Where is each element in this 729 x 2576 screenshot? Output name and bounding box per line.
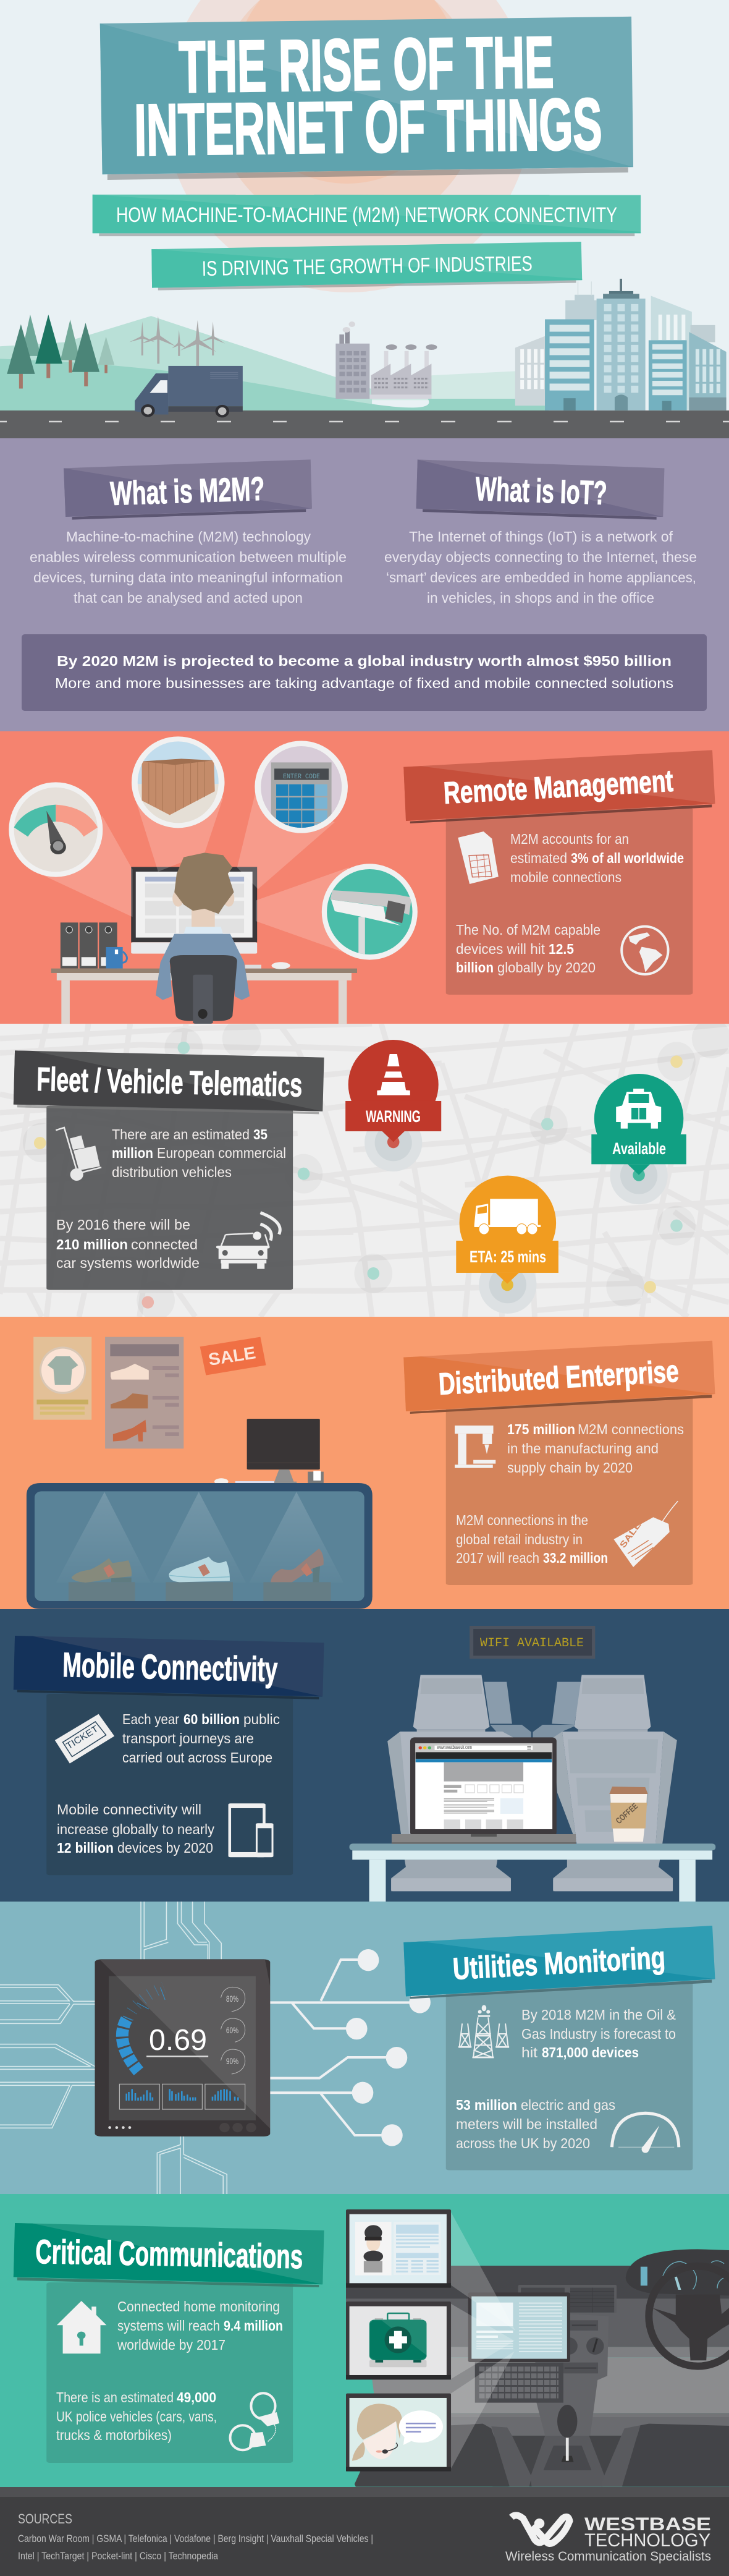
stat: 33.2 million retail <box>456 1512 608 1566</box>
tablet reading: 0.69 <box>149 2024 207 2057</box>
footer <box>0 2487 729 2576</box>
sim and globe panel background <box>446 808 693 995</box>
stat: 33.2 million retail: M2M connections in the <box>456 1512 588 1528</box>
text: IoT definition: everyday objects connecting to the Internet, these <box>384 549 697 565</box>
subtitle banners <box>93 195 641 291</box>
text: M2M definition: enables wireless communication between multiple <box>30 549 347 565</box>
connector nodes <box>346 1949 431 2146</box>
panel background <box>46 2282 293 2463</box>
steering wheel <box>649 2266 729 2366</box>
text: IoT definition: in vehicles, in shops and in the office <box>427 590 654 606</box>
vents and controls <box>518 2285 617 2373</box>
stat: 35 million vehicles: million <box>112 1145 153 1161</box>
stat: 33.2 million retail: 33.2 million <box>543 1550 608 1566</box>
landscape scene <box>0 279 727 411</box>
icon: oil rigs <box>458 2017 509 2057</box>
stat: 12.5 billion devices: devices will hit <box>456 941 546 957</box>
text: M2M definition: devices, turning data into meaningful information <box>33 569 343 585</box>
stat: 53 million meters <box>456 2097 615 2151</box>
operator <box>156 852 250 1024</box>
icon: sim card <box>458 831 499 884</box>
screen: suspect profile <box>346 2209 451 2288</box>
centre console <box>531 2314 609 2487</box>
poster: shirt <box>33 1337 91 1420</box>
panel background <box>446 1983 693 2170</box>
stat: 210 million car systems: car systems worldwide <box>56 1255 200 1271</box>
stat: 60 billion journeys <box>122 1711 280 1766</box>
stat: 175 million connections: supply chain by 2020 <box>507 1460 633 1476</box>
title banner <box>100 17 633 180</box>
shoe: brown brogue <box>72 1558 132 1583</box>
heading: mobile connectivity: Mobile Connectivity <box>62 1645 278 1689</box>
sources: Carbon War Room | GSMA | Telefonica | Vodafone | Berg Insight | Vauxhall Special Vehicles | <box>18 2533 373 2544</box>
stat: 3% of mobile connections <box>510 831 684 885</box>
icon: security camera <box>322 864 418 960</box>
icon: price tag <box>613 1501 678 1567</box>
shoe: sneaker <box>169 1557 230 1582</box>
subtitle banners: IS DRIVING THE GROWTH OF INDUSTRIES <box>202 252 533 281</box>
passenger seat <box>601 2424 729 2487</box>
stat: 49,000 police vehicles: UK police vehicles (cars, vans, <box>56 2408 217 2425</box>
callout: global industry: By 2020 M2M is projected to become a global industry worth almost $950 billion <box>57 653 672 669</box>
heading: utilities monitoring: Utilities Monitoring <box>452 1940 666 1986</box>
text: IoT definition <box>384 529 697 606</box>
stat: 60 billion journeys: Each year <box>122 1711 179 1727</box>
stat: 49,000 police vehicles: 49,000 <box>177 2389 216 2405</box>
stat: 49,000 police vehicles <box>56 2389 217 2443</box>
tablet <box>95 1959 270 2136</box>
connectors <box>270 1960 421 2135</box>
instrument cluster <box>626 2249 729 2295</box>
road <box>0 410 729 438</box>
desk <box>51 962 357 1024</box>
text: M2M definition <box>30 529 347 606</box>
dial labels: 90% <box>226 2056 238 2066</box>
icon: gauge <box>9 782 103 877</box>
circuit traces <box>0 1902 227 2194</box>
stat: 60 billion journeys: transport journeys are <box>122 1730 254 1746</box>
logo: Westbase Technology <box>505 2514 711 2564</box>
stat: 175 million connections: 175 million <box>507 1421 575 1437</box>
stat: 12.5 billion devices: The No. of M2M capable <box>456 922 600 938</box>
screen: first aid kit <box>346 2302 451 2379</box>
stat: 53 million meters: electric and gas <box>521 2097 615 2113</box>
panel background <box>446 1397 693 1585</box>
stat: 35 million vehicles: 35 <box>253 1126 268 1142</box>
stat: 871,000 devices: Gas Industry is forecast to <box>521 2026 676 2042</box>
pin label: available: Available <box>612 1139 666 1158</box>
icon: ticket <box>55 1714 114 1764</box>
stat: 210 million car systems <box>56 1217 200 1271</box>
dial labels: 60% <box>226 2025 238 2035</box>
stat: 9.4 million home systems: worldwide by 2017 <box>117 2337 225 2353</box>
map pin: ETA <box>456 1176 558 1314</box>
stat: 871,000 devices: By 2018 M2M in the Oil & <box>521 2007 676 2023</box>
stat: 60 billion journeys: public <box>243 1711 280 1727</box>
stat: 9.4 million home systems: systems will reach <box>117 2318 220 2334</box>
heading: what is IoT <box>416 459 664 520</box>
text: M2M definition: that can be analysed and acted upon <box>74 590 303 606</box>
stat: 210 million car systems: connected <box>131 1236 198 1252</box>
title text <box>134 22 602 171</box>
table <box>350 1843 715 1902</box>
map roads <box>0 1024 729 1317</box>
stat: 35 million vehicles <box>112 1126 286 1180</box>
callout: global industry <box>22 634 707 711</box>
till <box>214 1419 324 1485</box>
panel: mobile connectivity <box>0 1609 729 1902</box>
illustration: desk, operator and monitored devices <box>9 736 715 1024</box>
icon: keypad <box>255 741 348 833</box>
stat: 12 billion devices <box>57 1801 214 1856</box>
heading: what is M2M: What is M2M? <box>109 470 265 512</box>
stat: 175 million connections: M2M connections <box>578 1421 684 1437</box>
panel: fleet vehicle telematics <box>0 1019 729 1320</box>
panel: critical communications <box>0 2194 729 2487</box>
heading: critical communications: Critical Communications <box>35 2232 303 2276</box>
coffee cup <box>609 1787 648 1842</box>
poster: shoes <box>105 1337 183 1448</box>
stat: 12 billion devices: Mobile connectivity will <box>57 1801 201 1817</box>
stat: 12 billion devices: 12 billion <box>57 1840 114 1856</box>
laptop <box>392 1737 576 1844</box>
stat: 210 million car systems: 210 million <box>56 1236 128 1252</box>
laptop url: www.westbaseuk.com <box>436 1745 472 1750</box>
dial labels: 80% <box>226 1994 238 2004</box>
stat: 3% of mobile connections: 3% of all worldwide <box>571 850 684 866</box>
stat: 3% of mobile connections: mobile connections <box>510 869 622 885</box>
city <box>515 279 727 410</box>
stat: 12.5 billion devices <box>456 922 600 976</box>
logo: Westbase Technology: WESTBASE <box>584 2514 711 2535</box>
icon: hand truck <box>56 1128 101 1181</box>
logo: Westbase Technology: TECHNOLOGY <box>584 2530 710 2551</box>
stat: 12 billion devices: increase globally to nearly <box>57 1821 214 1837</box>
stat: 12.5 billion devices: globally by 2020 <box>497 959 596 976</box>
shoe: high heel <box>271 1549 324 1582</box>
map dots <box>34 1042 683 1309</box>
stat: 60 billion journeys: carried out across Europe <box>122 1749 272 1766</box>
stat: 175 million connections <box>507 1421 684 1476</box>
stat: 3% of mobile connections: M2M accounts for an <box>510 831 629 847</box>
text: IoT definition: The Internet of things (IoT) is a network of <box>409 529 673 545</box>
heading: what is IoT: What is IoT? <box>475 470 607 512</box>
stat: 53 million meters: meters will be installed <box>456 2116 597 2132</box>
wifi sign <box>470 1626 595 1659</box>
display case with shoes <box>27 1483 373 1609</box>
sources: SOURCES <box>18 2511 72 2527</box>
panel: utilities monitoring <box>0 1902 729 2194</box>
front seats <box>387 1675 677 1891</box>
console screen <box>468 2292 570 2362</box>
stat: 35 million vehicles: distribution vehicles <box>112 1164 232 1180</box>
icon: handcuffs <box>230 2393 279 2450</box>
panel: distributed enterprise <box>0 1317 729 1609</box>
icon: globe <box>622 927 668 974</box>
stat: 53 million meters: 53 million <box>456 2097 517 2113</box>
tag text: SALE <box>617 1520 643 1550</box>
panel background <box>46 1694 293 1875</box>
icon: connected car <box>216 1213 280 1269</box>
panel: what is M2M and IoT <box>0 438 729 731</box>
stat: 33.2 million retail: global retail industry in <box>456 1531 583 1547</box>
pin label: ETA: ETA: 25 mins <box>470 1248 546 1266</box>
car interior and screens <box>346 2209 729 2487</box>
stat: 871,000 devices <box>521 2007 676 2060</box>
text: M2M definition: Machine-to-machine (M2M) technology <box>66 529 311 545</box>
stat: 60 billion journeys: 60 billion <box>183 1711 240 1727</box>
stat: 175 million connections: in the manufacturing and <box>507 1440 659 1456</box>
stat: 12.5 billion devices: 12.5 <box>549 941 574 957</box>
icon: house <box>57 2301 106 2353</box>
pin label: warning: WARNING <box>366 1107 421 1126</box>
dial labels <box>226 1994 238 2066</box>
map pin: warning <box>345 1040 441 1171</box>
wifi sign text: WIFI AVAILABLE <box>480 1636 584 1651</box>
sources <box>18 2511 373 2562</box>
stat: 871,000 devices: 871,000 devices <box>542 2044 639 2060</box>
logo: Westbase Technology: Wireless Communication Specialists <box>505 2549 711 2564</box>
stat: 9.4 million home systems: Connected home monitoring <box>117 2298 280 2315</box>
rear seats <box>484 1682 582 1738</box>
icon: drill machine <box>455 1426 495 1468</box>
screen: call operator <box>346 2394 451 2472</box>
factory <box>335 321 437 399</box>
stat: 3% of mobile connections: estimated <box>510 850 567 866</box>
stat: 12 billion devices: devices by 2020 <box>117 1840 213 1856</box>
ticket text: TICKET <box>64 1724 100 1751</box>
icon: shipping container <box>132 736 225 828</box>
stat: 9.4 million home systems: 9.4 million <box>224 2318 283 2334</box>
callout: global industry: More and more businesses are taking advantage of fixed and mobile connected solutions <box>55 675 673 691</box>
stat: 35 million vehicles: European commercial <box>157 1145 286 1161</box>
header panel <box>0 0 729 438</box>
map dot halos <box>23 1019 729 1320</box>
stat: 35 million vehicles: There are an estimated <box>112 1126 250 1142</box>
coffee label: COFFEE <box>613 1801 639 1826</box>
stat: 12.5 billion devices: billion <box>456 959 494 976</box>
sale sign <box>200 1337 266 1375</box>
binders <box>61 922 117 969</box>
icon: meter gauge <box>612 2113 679 2153</box>
map pin: available <box>591 1074 686 1204</box>
keyboard <box>475 2363 563 2403</box>
text: IoT definition: ‘smart’ devices are embedded in home appliances, <box>386 569 696 585</box>
stat: 33.2 million retail: 2017 will reach <box>456 1550 539 1566</box>
stat: 49,000 police vehicles: trucks & motorbikes) <box>56 2427 172 2443</box>
heading: what is M2M <box>64 459 312 520</box>
mug <box>106 947 127 969</box>
stat: 210 million car systems: By 2016 there will be <box>56 1217 190 1233</box>
panel: remote management <box>0 731 729 1024</box>
stat: 49,000 police vehicles: There is an estimated <box>56 2389 174 2405</box>
stats panel background <box>46 1105 293 1290</box>
train seats, table, laptop and coffee <box>350 1675 715 1902</box>
light beams <box>451 2212 515 2468</box>
sources: Intel | TechTarget | Pocket-lint | Cisco | Technopedia <box>18 2550 218 2562</box>
delivery truck <box>135 366 243 417</box>
icon: tablet and phone <box>229 1803 274 1857</box>
stat: 53 million meters: across the UK by 2020 <box>456 2135 590 2151</box>
stat: 9.4 million home systems <box>117 2298 283 2353</box>
heading: fleet vehicle telematics: Fleet / Vehicle Telematics <box>36 1061 303 1104</box>
keypad display text: ENTER CODE <box>283 773 320 781</box>
sale sign text: SALE <box>207 1343 257 1369</box>
sun circles <box>165 0 532 292</box>
stat: 871,000 devices: hit <box>521 2044 538 2060</box>
